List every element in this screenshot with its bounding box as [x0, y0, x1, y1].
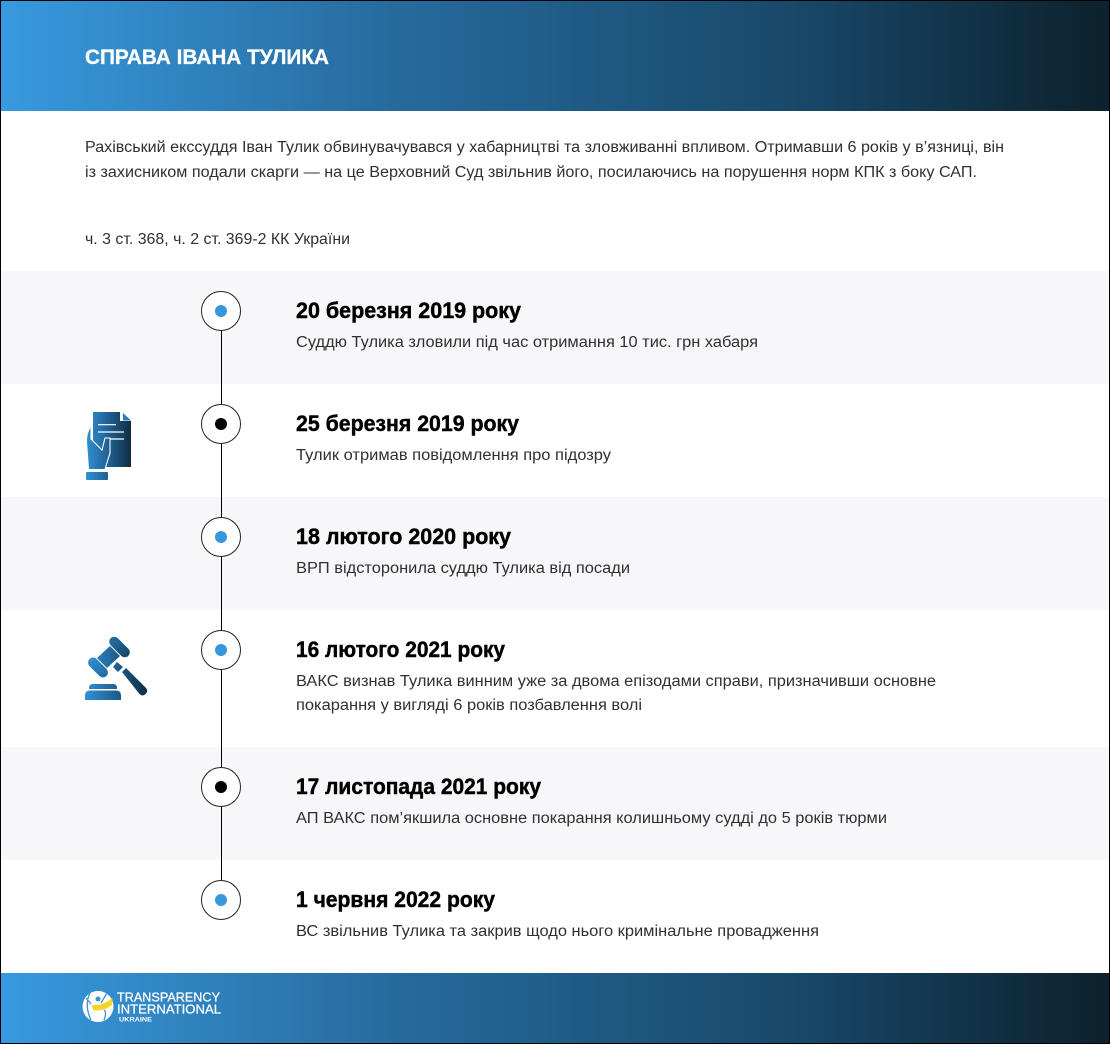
timeline event: 17 November 2021: АП ВАКС пом’якшила основне покарання колишньому судді до 5 років тюрми	[296, 810, 887, 827]
timeline event: 18 February 2020	[202, 518, 630, 577]
header banner	[1, 1, 1109, 111]
timeline event: 16 February 2021: 16 лютого 2021 року	[296, 637, 506, 662]
timeline event: 20 March 2019: Суддю Тулика зловили під час отримання 10 тис. грн хабаря	[296, 334, 758, 351]
timeline event: 16 February 2021: ВАКС визнав Тулика винним уже за двома епізодами справи, призначивши основне	[296, 673, 936, 690]
timeline event: 17 November 2021: 17 листопада 2021 року	[296, 774, 542, 799]
logo: Transparency International Ukraine: TRANSPARENCY	[117, 990, 221, 1004]
timeline event: 25 March 2019	[202, 404, 611, 464]
title: СПРАВА ІВАНА ТУЛИКА	[85, 46, 329, 69]
timeline event: 1 June 2022: ВС звільнив Тулика та закрив щодо нього кримінальне провадження	[296, 923, 819, 940]
timeline event: 17 November 2021	[202, 768, 887, 827]
legal reference: ч. 3 ст. 368, ч. 2 ст. 369-2 КК України	[85, 231, 350, 248]
timeline event: 1 June 2022	[202, 880, 819, 940]
timeline event: 25 March 2019: 25 березня 2019 року	[296, 411, 520, 436]
intro text: із захисником подали скарги — на це Верховний Суд звільнив його, посилаючись на порушення норм КПК з боку САП.	[85, 164, 977, 181]
timeline event: 18 February 2020: ВРП відсторонила суддю Тулика від посади	[296, 560, 630, 577]
timeline event: 20 March 2019	[202, 292, 758, 351]
logo: Transparency International Ukraine: INTERNATIONAL	[117, 1002, 221, 1016]
icon: hand holding document	[86, 412, 131, 480]
timeline event: 18 February 2020: 18 лютого 2020 року	[296, 524, 512, 549]
intro text: Рахівський екссуддя Іван Тулик обвинувачувався у хабарництві та зловживанні впливом. Отримавши 6 років у в’язниці, він	[85, 139, 1004, 156]
timeline event: 20 March 2019: 20 березня 2019 року	[296, 298, 522, 323]
logo: Transparency International Ukraine	[82, 990, 221, 1024]
timeline event: 25 March 2019: Тулик отримав повідомлення про підозру	[296, 447, 611, 464]
row backgrounds	[1, 271, 1109, 860]
icon: gavel	[85, 635, 147, 700]
timeline event: 16 February 2021	[202, 630, 936, 714]
timeline event: 16 February 2021: покарання у вигляді 6 років позбавлення волі	[296, 697, 642, 714]
footer banner	[1, 973, 1109, 1043]
timeline event: 1 June 2022: 1 червня 2022 року	[296, 887, 496, 912]
logo: Transparency International Ukraine: UKRAINE	[119, 1016, 153, 1024]
intro text	[85, 139, 1004, 181]
timeline line	[220, 311, 222, 900]
